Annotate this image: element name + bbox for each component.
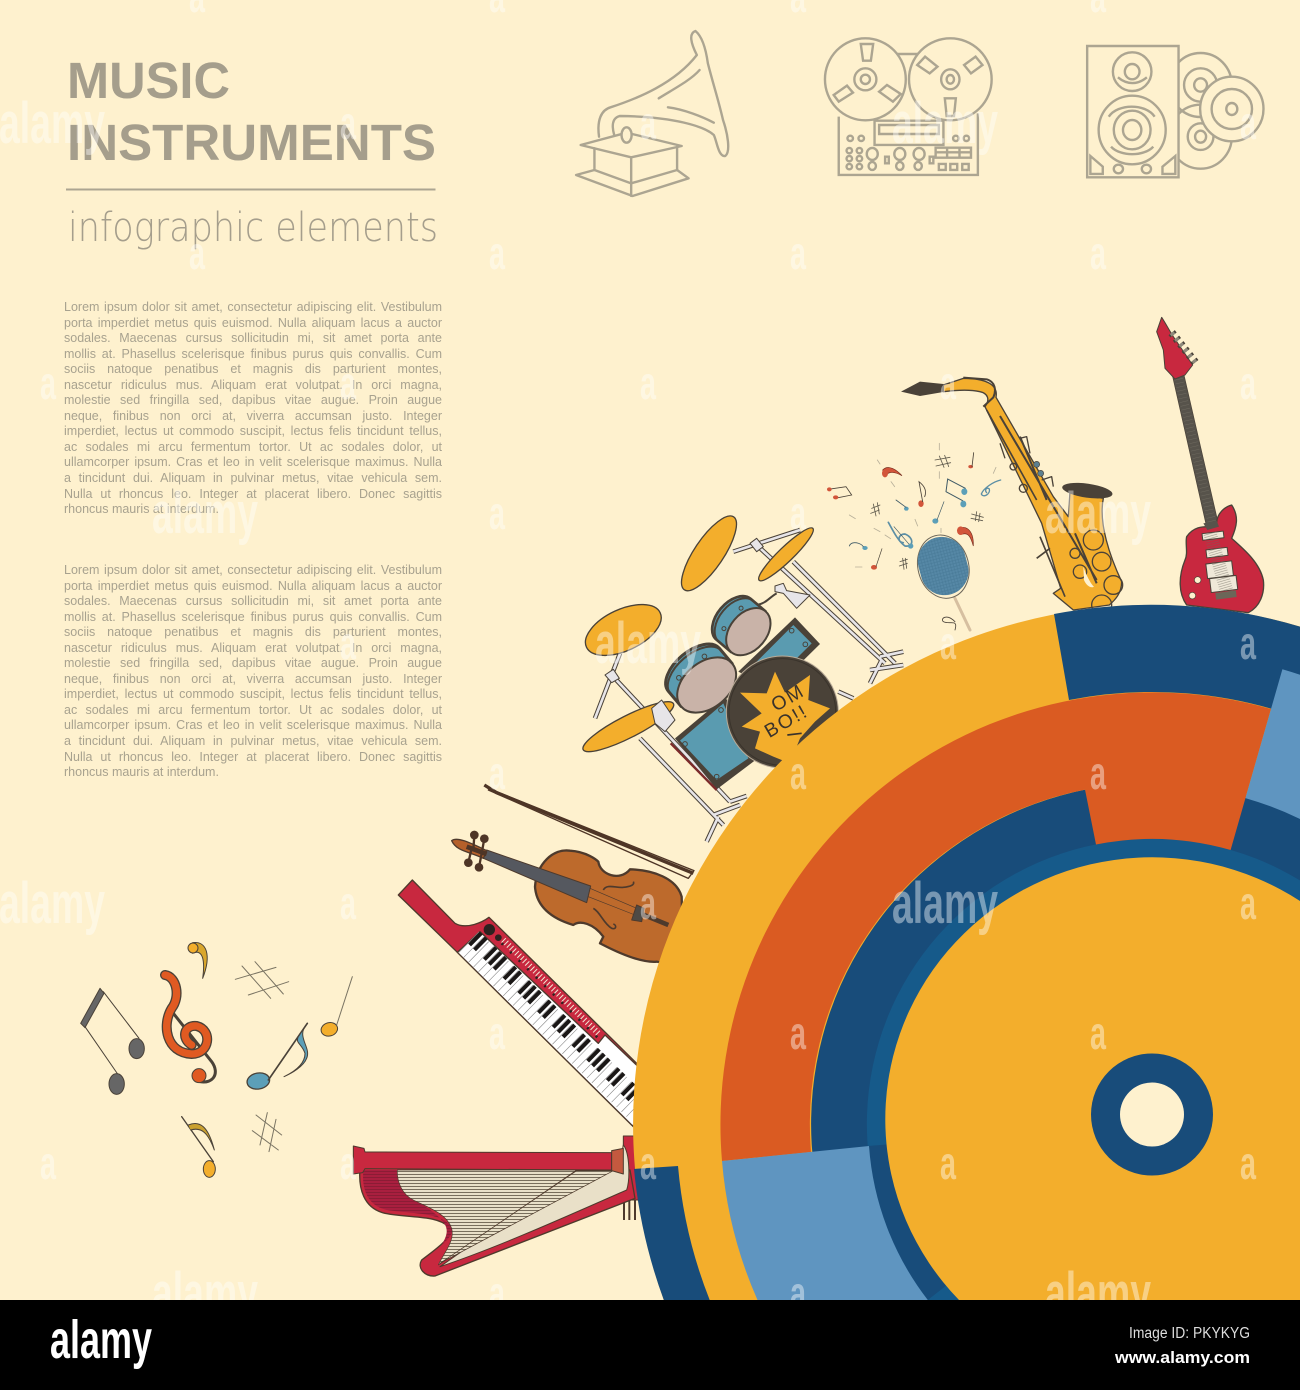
icon: reel-to-reel tape recorder	[825, 38, 992, 175]
text block: first paragraph: imperdiet, lectus ut commodo suscipit, lectus felis tincidunt tellus,	[64, 424, 442, 438]
ring: outer yellow	[633, 605, 1300, 1300]
violin neck and scroll	[452, 831, 591, 903]
stock watermarks: a	[489, 1267, 505, 1319]
stock watermarks: a	[940, 617, 956, 669]
stock watermarks: a	[640, 357, 656, 409]
violin bow	[484, 785, 694, 878]
text block: first paragraph: Nulla ut rhoncus leo. Integer at placerat libero. Donec sagittis	[64, 487, 442, 501]
harp neck plate	[440, 1145, 629, 1267]
sharp sign	[235, 962, 289, 998]
note: orange treble clef	[165, 975, 215, 1083]
kick drum with star: BO!!	[761, 701, 812, 743]
text block: first paragraph: molestie sed fringilla sed, dapibus vitae augue. Proin augue	[64, 393, 442, 407]
sharp sign	[252, 1113, 282, 1152]
text block: first paragraph: ac sodales mi arcu fermentum tortor. Ut ac sodales dolor, ut	[64, 440, 442, 454]
text block: second paragraph: porta imperdiet metus quis euismod. Nulla aliquam lacus a auctor	[64, 579, 442, 593]
stock watermarks: a	[40, 1137, 56, 1189]
stock watermarks: a	[640, 877, 656, 929]
harp pillar	[623, 1136, 638, 1200]
stock watermarks: a	[640, 97, 656, 149]
stock watermarks: a	[489, 747, 505, 799]
stock watermarks: a	[489, 487, 505, 539]
stock watermarks: a	[790, 1007, 806, 1059]
note cluster: sharps	[871, 455, 983, 569]
kick drum with star	[726, 656, 838, 768]
stock watermarks: a	[340, 877, 356, 929]
note cluster: blue notes	[849, 479, 1001, 550]
stock watermarks: a	[40, 357, 56, 409]
text block: second paragraph: neque, finibus non orci at, viverra accumsan justo. Integer	[64, 672, 442, 686]
icon: speaker with discs	[1087, 46, 1263, 177]
stock watermarks: a	[1090, 227, 1106, 279]
ring: navy	[811, 783, 1300, 1300]
vinyl record chart	[633, 605, 1300, 1300]
text block: first paragraph: sociis natoque penatibus et magnis dis parturient montes,	[64, 362, 442, 376]
kick drum with star: OM	[768, 681, 809, 716]
title: infographic elements	[68, 205, 438, 251]
violin with bow	[452, 785, 694, 967]
cymbal: left	[578, 594, 669, 666]
harp soundbox	[360, 1168, 635, 1276]
stock watermarks: alamy	[892, 91, 998, 156]
note: yellow bass clef	[188, 942, 207, 978]
harp soundbox shade	[363, 1170, 452, 1245]
music notes: lower left cluster	[81, 942, 352, 1177]
stock watermarks: a	[790, 747, 806, 799]
small music notes above microphone	[827, 443, 1001, 570]
icon: gramophone	[576, 31, 728, 196]
harp	[353, 1136, 638, 1276]
stock watermarks: a	[790, 487, 806, 539]
stock watermarks: a	[940, 357, 956, 409]
drum stands	[595, 530, 903, 842]
electric guitar	[1157, 317, 1264, 613]
text block: first paragraph: a tincidunt dui. Aliquam in pulvinar metus, vitae vehicula sem.	[64, 471, 442, 485]
note: blue eighth note	[246, 1023, 308, 1091]
cymbal: top right thin	[754, 523, 818, 586]
stock watermarks: a	[1240, 617, 1256, 669]
text block: second paragraph: ac sodales mi arcu fermentum tortor. Ut ac sodales dolor, ut	[64, 703, 442, 717]
tom: small	[704, 588, 780, 664]
text block: second paragraph: molestie sed fringilla sed, dapibus vitae augue. Proin augue	[64, 656, 442, 670]
stock watermarks: a	[340, 357, 356, 409]
note: yellow flagged note	[182, 1117, 215, 1177]
keytar	[398, 880, 640, 1130]
footer bar	[0, 1300, 1300, 1390]
text block: first paragraph	[64, 300, 442, 516]
text block: second paragraph: sociis natoque penatibus et magnis dis parturient montes,	[64, 625, 442, 639]
cymbal: top	[672, 509, 746, 598]
text block: second paragraph: nascetur ridiculus mus. Aliquam erat volutpat. In orci magna,	[64, 641, 442, 655]
microphone	[911, 529, 976, 630]
stock watermarks: alamy	[595, 611, 701, 676]
stock watermarks: a	[340, 1137, 356, 1189]
stock watermarks: alamy	[152, 1261, 258, 1326]
tom: large	[656, 634, 747, 724]
stock watermarks: a	[489, 1007, 505, 1059]
stand clamps	[605, 538, 810, 732]
stock watermarks: a	[1240, 1137, 1256, 1189]
stock watermarks: a	[1240, 877, 1256, 929]
stock watermarks: a	[489, 227, 505, 279]
segment: orange arc	[720, 692, 1271, 1161]
title	[66, 52, 438, 251]
segment: navy groove lower left	[868, 1124, 1152, 1300]
harp top bar	[353, 1146, 612, 1174]
text block: second paragraph: Nulla ut rhoncus leo. Integer at placerat libero. Donec sagittis	[64, 750, 442, 764]
footer image id: Image ID: PKYKYG	[1129, 1325, 1250, 1342]
bass mount shell upper	[738, 617, 820, 690]
stock watermarks: alamy	[1045, 1261, 1151, 1326]
stock watermarks: a	[189, 227, 205, 279]
stock watermarks: a	[1240, 97, 1256, 149]
note cluster: red notes	[827, 453, 974, 570]
record centre ring	[1091, 1054, 1213, 1176]
note cluster: ticks	[849, 443, 996, 567]
stock watermarks: a	[340, 97, 356, 149]
stock watermarks: a	[790, 227, 806, 279]
text block: first paragraph: porta imperdiet metus quis euismod. Nulla aliquam lacus a auctor	[64, 316, 442, 330]
segment: light blue top right	[1245, 669, 1300, 819]
stock watermarks: a	[940, 1137, 956, 1189]
drum kit	[578, 509, 903, 842]
text block: first paragraph: nascetur ridiculus mus. Aliquam erat volutpat. In orci magna,	[64, 378, 442, 392]
title: INSTRUMENTS	[67, 114, 436, 171]
harp pedals	[624, 1200, 635, 1220]
segment: outer navy lower left	[634, 1166, 710, 1300]
text block: second paragraph: a tincidunt dui. Aliquam in pulvinar metus, vitae vehicula sem.	[64, 734, 442, 748]
text block: first paragraph: Lorem ipsum dolor sit amet, consectetur adipiscing elit. Vestibulum	[64, 300, 442, 314]
violin body	[535, 850, 683, 967]
stock watermarks: alamy	[152, 481, 258, 546]
ring: lighter blue groove	[867, 839, 1300, 1300]
footer logo: alamy	[50, 1310, 152, 1370]
text block: first paragraph: neque, finibus non orci at, viverra accumsan justo. Integer	[64, 409, 442, 423]
stock watermarks: alamy	[892, 871, 998, 936]
saxophone	[901, 378, 1123, 615]
record centre hole	[1120, 1082, 1184, 1146]
harp strings	[397, 1170, 577, 1265]
stock watermarks: a	[1240, 357, 1256, 409]
note: grey beamed pair	[81, 988, 144, 1094]
footer url: www.alamy.com	[1114, 1348, 1250, 1367]
stock watermarks: alamy	[1045, 481, 1151, 546]
stock watermarks: a	[1090, 747, 1106, 799]
record label disc	[885, 857, 1300, 1300]
stock watermarks: a	[790, 1267, 806, 1319]
stock watermarks: alamy	[0, 91, 105, 156]
stock watermarks: alamy	[0, 871, 105, 936]
text block: second paragraph: mollis at. Phasellus scelerisque finibus purus quis convallis. Cum	[64, 610, 442, 624]
title: MUSIC	[67, 52, 230, 109]
text block: second paragraph: ullamcorper ipsum. Cras et leo in velit scelerisque maximus. Nulla	[64, 718, 442, 732]
stock watermarks: a	[1090, 1007, 1106, 1059]
bass mount shell lower	[671, 697, 760, 790]
segment: light blue lower left	[722, 1146, 928, 1300]
segment: outer navy top right	[1054, 605, 1300, 718]
text block: first paragraph: rhoncus mauris at interdum.	[64, 502, 219, 516]
stock watermarks: a	[340, 617, 356, 669]
text block: second paragraph: sodales. Maecenas cursus sollicitudin mi, sit amet porta ante	[64, 594, 442, 608]
text block: second paragraph	[64, 563, 442, 779]
cymbal: lower left thin	[578, 694, 678, 759]
note: yellow quarter note	[320, 977, 352, 1038]
text block: second paragraph: rhoncus mauris at interdum.	[64, 765, 219, 779]
text block: first paragraph: sodales. Maecenas cursus sollicitudin mi, sit amet porta ante	[64, 331, 442, 345]
text block: first paragraph: mollis at. Phasellus scelerisque finibus purus quis convallis. Cum	[64, 347, 442, 361]
stock watermarks: a	[640, 1137, 656, 1189]
violin details	[588, 882, 668, 929]
text block: first paragraph: ullamcorper ipsum. Cras et leo in velit scelerisque maximus. Nulla	[64, 455, 442, 469]
text block: second paragraph: imperdiet, lectus ut commodo suscipit, lectus felis tincidunt tellus,	[64, 687, 442, 701]
text block: second paragraph: Lorem ipsum dolor sit amet, consectetur adipiscing elit. Vestibulum	[64, 563, 442, 577]
